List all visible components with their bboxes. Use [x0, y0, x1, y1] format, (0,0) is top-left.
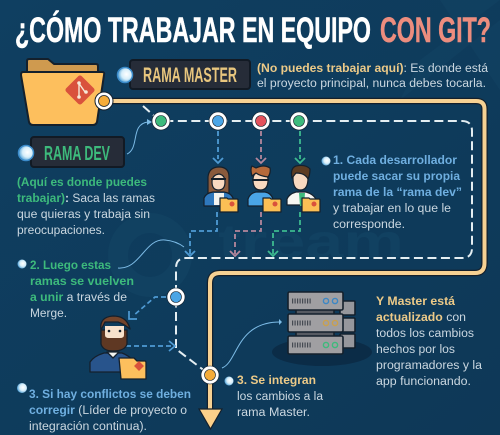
text: step 2: Merge.	[30, 308, 67, 320]
arrow: dev to first node	[127, 122, 148, 154]
text: step 3 conflicts: integración continua).	[29, 421, 147, 433]
label: rama dev	[31, 137, 124, 167]
label: rama master	[130, 60, 250, 89]
text: rama dev description	[17, 177, 155, 237]
master branch line	[112, 101, 484, 412]
folder small 2	[263, 198, 281, 212]
branch arrows down and back	[185, 131, 305, 256]
developer 2	[248, 166, 281, 212]
text: master description: (No puedes trabajar aquí ): Es donde está	[257, 63, 489, 75]
bullet: master	[118, 68, 132, 82]
text: master updated: hechos por los	[376, 344, 455, 356]
icon: git diamond	[64, 74, 96, 106]
folder small 3	[302, 198, 320, 212]
text: step 3 conflicts: 3. Si hay conflictos se deben	[29, 389, 191, 401]
arrow: integration to servers	[222, 322, 280, 368]
text: master description	[257, 63, 489, 90]
arrow: step 2 to merge	[118, 240, 184, 268]
arrow head: dev	[147, 119, 152, 125]
text: step 1	[322, 155, 462, 231]
text: step 3 integrate: 3. Se integran	[237, 375, 316, 387]
bullet: dev	[18, 146, 34, 160]
text: step 3 integrate: rama Master.	[237, 407, 310, 419]
commit nodes	[152, 112, 308, 130]
folder: merge	[119, 358, 146, 379]
arrow head: master	[199, 409, 222, 429]
watermark	[118, 216, 404, 287]
merge arrows	[126, 297, 175, 351]
node: integration	[201, 366, 219, 384]
text: step 2: ramas se vuelven	[30, 276, 134, 288]
text: step 1: corresponde.	[333, 219, 405, 231]
developer 1	[204, 167, 238, 212]
text: step 3 conflicts: corregir (Líder de proyecto o	[29, 405, 187, 417]
text: step 1: rama de la “rama dev”	[333, 187, 462, 199]
text: step 2: 2. Luego estas	[30, 260, 111, 272]
text: master updated: Y Master está	[376, 296, 456, 308]
text: master updated	[376, 296, 483, 388]
label: rama master: RAMA MASTER	[143, 64, 237, 87]
developer 3	[287, 165, 320, 212]
dev branch dashed path	[143, 106, 472, 375]
text: rama dev description: trabajar): Saca las ramas	[17, 193, 155, 205]
text: step 1: y trabajar en lo que le	[333, 203, 451, 215]
text: step 1: puede sacar su propia	[333, 171, 461, 183]
text: step 3 integrate: los cambios a la	[237, 391, 324, 403]
text: rama dev description: que quieras y trabaja sin	[17, 209, 150, 221]
text: master updated: todos los cambios	[376, 328, 474, 340]
text: master updated: actualizado con	[376, 312, 466, 324]
watermark: tream	[218, 216, 404, 269]
text: master updated: programadores y la	[376, 360, 483, 372]
integrator person	[90, 316, 146, 379]
icon: servers	[272, 292, 372, 366]
text: step 2	[18, 260, 134, 320]
text: step 3 conflicts	[17, 383, 191, 433]
text: rama dev description: (Aquí es donde puedes	[17, 177, 147, 189]
node: master start	[95, 92, 113, 110]
text: step 1: 1. Cada desarrollador	[333, 155, 458, 167]
text: master description: el proyecto principal, nunca debes tocarla.	[257, 78, 486, 90]
label: rama dev: RAMA DEV	[44, 143, 110, 165]
node: merge	[167, 288, 185, 306]
text: master updated: app funcionando.	[376, 376, 471, 388]
icon: folder with git logo	[21, 59, 104, 125]
folder small 1	[220, 198, 238, 212]
text: step 2: a unir a través de	[30, 292, 127, 304]
text: rama dev description: preocupaciones.	[17, 225, 105, 237]
text: step 3 integrate	[224, 375, 324, 419]
arrow head: servers	[279, 319, 282, 325]
